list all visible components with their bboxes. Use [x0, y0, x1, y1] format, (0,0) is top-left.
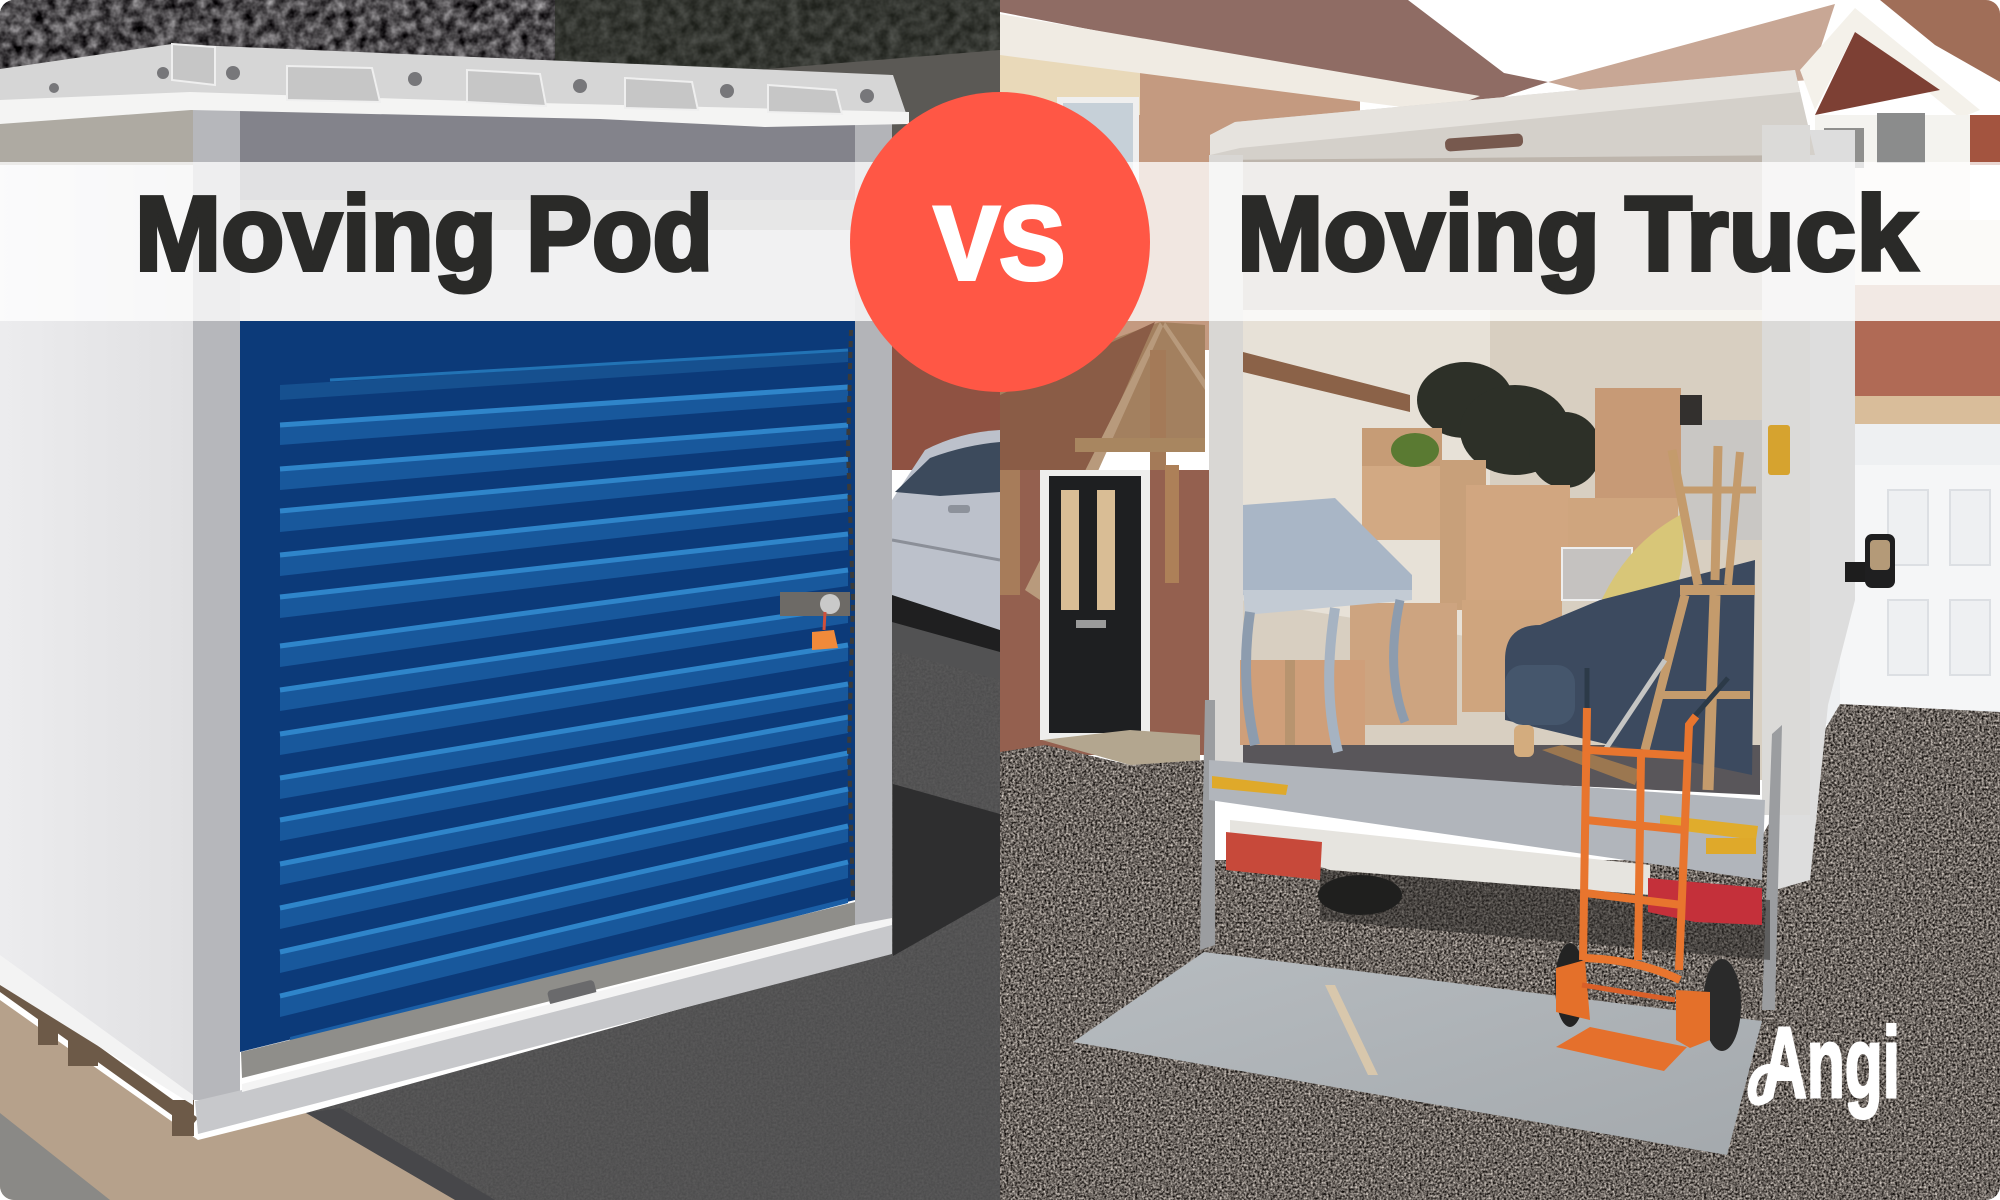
axle bars — [1582, 985, 1675, 1000]
road surface grain — [306, 650, 1000, 1200]
title: moving pod: Pod — [526, 175, 713, 293]
truck right side panel — [1775, 130, 1855, 890]
photo panel: moving pod — [0, 0, 1000, 1200]
pale wall behind dormer — [1810, 220, 2000, 285]
interior left wall — [1240, 310, 1490, 640]
clear storage crate — [1562, 548, 1632, 600]
translucent title band — [0, 162, 2000, 321]
large middle box — [1466, 485, 1570, 600]
upper right box — [1568, 498, 1678, 553]
pod base rail on side — [0, 955, 193, 1105]
Angi logo — [1752, 1007, 1900, 1119]
left tail light — [1226, 832, 1322, 880]
kerb strip — [306, 1108, 495, 1200]
wheel plates — [1556, 960, 1590, 1020]
lift ramp — [1073, 952, 1762, 1155]
hazard stripes right — [1660, 815, 1758, 840]
toe plate — [1556, 1027, 1687, 1071]
truck under-ground gravel — [1205, 860, 1765, 1040]
tail lift rails — [1200, 700, 1782, 1010]
pod white side wall — [0, 321, 193, 1095]
parked silver car — [892, 430, 1000, 630]
blue roller door — [240, 321, 855, 1052]
upper brick — [1810, 285, 2000, 321]
white garage door — [1800, 424, 2000, 724]
truck floor — [1240, 745, 1760, 795]
dormer gable — [1800, 8, 1980, 118]
brick wall by entrance — [1000, 470, 1210, 755]
pod body — [0, 44, 909, 1134]
white sky — [1000, 0, 2000, 130]
front left frame — [193, 110, 240, 1100]
pod feet — [0, 975, 198, 1136]
stacked narrow box — [1440, 460, 1486, 610]
cargo — [1240, 362, 1762, 790]
right tail light — [1648, 878, 1762, 925]
silver door threshold — [241, 902, 855, 1078]
Angi logo: Angi — [1762, 1007, 1900, 1119]
neighbouring brick wall — [892, 346, 1000, 470]
left pillar — [1209, 155, 1243, 775]
wheels — [1555, 943, 1585, 1027]
middle lower box — [1462, 600, 1562, 712]
photo panel: moving truck — [1000, 0, 2000, 1200]
right house roof — [1548, 4, 1835, 95]
sofa foot — [1514, 725, 1534, 757]
header highlight — [1210, 70, 1800, 155]
upper shadow under roof — [0, 105, 193, 165]
title: moving pod: Moving — [135, 175, 497, 293]
roof raised notches — [172, 44, 842, 114]
truck cargo interior walls — [1240, 310, 1770, 780]
frame rails and bars — [1583, 708, 1696, 980]
wooden rail — [1243, 352, 1410, 412]
door slats — [280, 350, 848, 1048]
title: moving truck: Truck — [1625, 175, 1918, 293]
tan wall strip — [1850, 396, 2000, 424]
house walls — [1000, 50, 1360, 350]
tall box — [1595, 388, 1681, 498]
white bumper — [1230, 820, 1650, 895]
shadow under roof front — [238, 105, 858, 200]
sill highlight — [242, 918, 892, 1092]
truck upper interior seen through band — [1240, 150, 1770, 315]
brick wall right — [1850, 321, 2000, 400]
far right roof — [1880, 0, 2000, 82]
lower left tall box — [1350, 603, 1457, 725]
door step — [1042, 730, 1200, 765]
broom — [1542, 660, 1665, 785]
dormer window — [1815, 113, 2000, 220]
underside shadow — [1320, 870, 1770, 960]
paving stones — [0, 1113, 110, 1200]
blue sofa — [1505, 560, 1755, 775]
title: moving truck: Moving — [1237, 175, 1600, 293]
pod roof — [0, 44, 906, 112]
yellow cushion — [1598, 515, 1683, 609]
white fascia — [1000, 14, 1480, 112]
plant — [1417, 362, 1601, 488]
wing mirror — [1845, 534, 1895, 588]
control box — [1768, 425, 1790, 475]
roof lower lip — [0, 92, 909, 127]
upper front panel — [240, 230, 855, 321]
pod front sill — [195, 923, 892, 1134]
vs badge: VS — [934, 186, 1065, 302]
tail panel — [1209, 760, 1765, 880]
truck — [1209, 70, 1895, 890]
rear wheel — [1318, 875, 1402, 915]
sandy verge — [0, 1000, 491, 1200]
brake light strip — [1445, 133, 1523, 152]
truck top header — [1210, 70, 1815, 160]
wooden stool — [1645, 446, 1756, 790]
dark panel lip — [238, 200, 858, 230]
right pillar — [1762, 125, 1810, 815]
gravel driveway — [1000, 704, 2000, 1200]
small potted plant — [1391, 433, 1439, 467]
mirror panel — [1680, 420, 1762, 540]
box with flaps — [1362, 428, 1442, 540]
door edge chain — [848, 330, 853, 900]
door lock and orange tag — [780, 592, 850, 650]
vs badge — [850, 92, 1150, 392]
warning label — [1706, 838, 1756, 854]
roof bolts — [49, 66, 874, 103]
front right frame — [855, 110, 892, 930]
porch canopy — [1000, 322, 1205, 600]
ramp reflection — [1325, 985, 1378, 1075]
asphalt road — [306, 610, 1000, 1200]
front door — [1040, 470, 1150, 740]
left house roof — [1000, 0, 1548, 105]
door latch handle — [548, 980, 596, 1004]
handles — [1587, 668, 1728, 718]
dark area beneath the car — [892, 595, 1000, 652]
background trees and sky — [0, 0, 1000, 140]
front floor box — [1240, 660, 1365, 745]
hazard stripes left — [1212, 776, 1288, 795]
orange hand truck — [1555, 668, 1741, 1071]
writing desk — [1243, 498, 1412, 752]
pod shadow — [893, 784, 1000, 956]
